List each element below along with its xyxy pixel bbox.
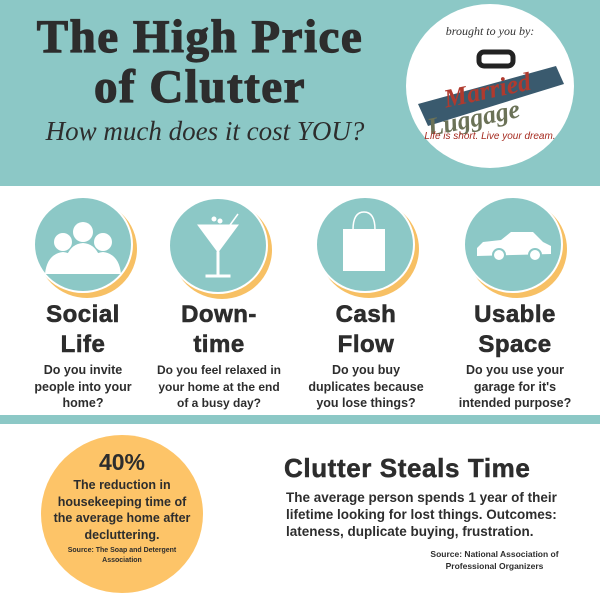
logo tagline bottom: Life is short. Live your dream. (424, 131, 556, 142)
stat circle: 40%: The reduction in (73, 478, 171, 492)
column: downtime (157, 301, 281, 410)
header band (0, 0, 600, 186)
heading: clutter steals time: Clutter Steals Time (284, 453, 530, 483)
title: The High Price (37, 11, 363, 63)
column: social life: Do you invite (44, 363, 122, 377)
subtitle: How much does it cost YOU? (46, 116, 364, 146)
icon: shopping bag (317, 198, 419, 298)
stat circle: 40%: Association (102, 557, 142, 564)
stat circle: 40%: decluttering. (84, 528, 160, 542)
column: cash flow: duplicates because (308, 380, 424, 394)
column: usable space: Usable (474, 301, 556, 328)
column: cash flow: Cash (336, 301, 396, 328)
column: cash flow: you lose things? (316, 396, 416, 410)
text block (286, 490, 557, 539)
title (36, 11, 363, 113)
column: downtime: time (193, 331, 245, 358)
column: social life: home? (62, 396, 103, 410)
column: downtime: your home at the end (158, 380, 280, 394)
column: usable space: garage for it's (474, 380, 556, 394)
source: Source: National Association of (430, 549, 559, 559)
column: usable space (459, 301, 571, 410)
stat circle: 40%: housekeeping time of (58, 494, 186, 508)
text block: lateness, duplicate buying, frustration. (286, 524, 534, 539)
icon: car (465, 198, 567, 298)
stat circle: 40%: the average home after (54, 511, 190, 525)
logo tagline top: brought to you by: (446, 24, 534, 38)
column: cash flow (308, 301, 424, 410)
source: Professional Organizers (446, 561, 543, 571)
text block: lifetime looking for lost things. Outcomes: (286, 507, 557, 522)
column: cash flow: Flow (338, 331, 394, 358)
divider stripe (0, 415, 600, 424)
column: social life: Life (61, 331, 105, 358)
icon: people (35, 198, 137, 298)
text block: The average person spends 1 year of their (286, 490, 557, 505)
stat circle: 40%: 40% (99, 449, 145, 475)
column: cash flow: Do you buy (332, 363, 400, 377)
column: social life: people into your (34, 380, 132, 394)
column: downtime: Down- (181, 301, 257, 328)
column: social life: Social (46, 301, 120, 328)
logo graphic: Married (440, 67, 534, 114)
column: usable space: Do you use your (466, 363, 564, 377)
stat circle: 40%: Source: The Soap and Detergent (68, 547, 176, 554)
logo graphic (418, 50, 564, 134)
column: downtime: of a busy day? (177, 396, 261, 410)
source (430, 549, 559, 571)
column: downtime: Do you feel relaxed in (157, 363, 281, 377)
title: of Clutter (94, 61, 306, 113)
stat circle: 40% (41, 435, 203, 593)
icon: martini (170, 199, 272, 299)
column: social life (34, 301, 132, 410)
column: usable space: intended purpose? (459, 396, 571, 410)
column: usable space: Space (478, 331, 552, 358)
logo circle (406, 4, 574, 168)
